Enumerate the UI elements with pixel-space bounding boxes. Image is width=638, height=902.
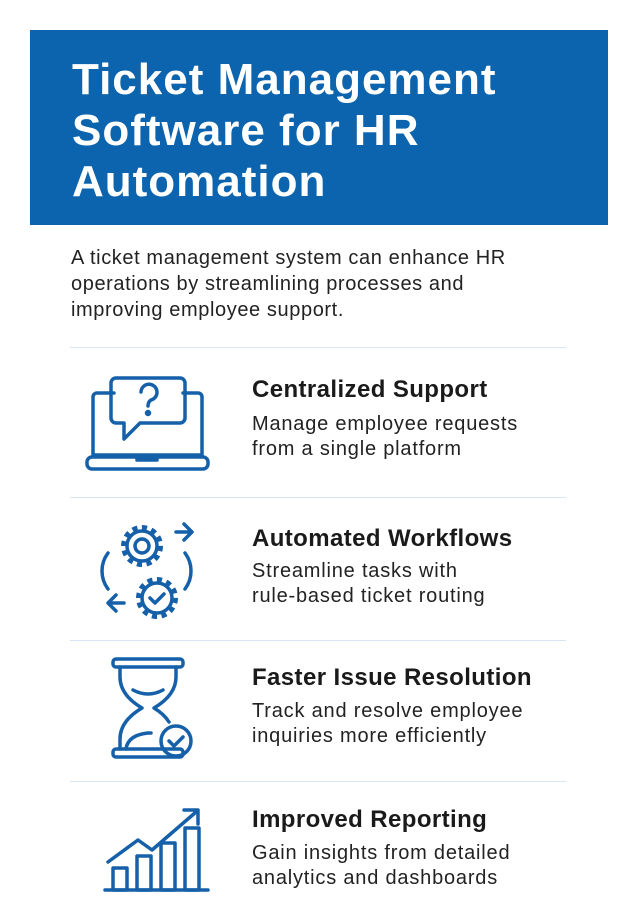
heading: faster issue resolution: Faster Issue Resolution xyxy=(252,664,532,691)
desc: centralized support: Manage employee requests xyxy=(252,413,518,435)
icon: laptop with question xyxy=(87,378,208,469)
desc: automated workflows xyxy=(252,560,485,607)
desc: faster issue resolution: inquiries more efficiently xyxy=(252,725,487,747)
title: Automation xyxy=(72,157,326,206)
desc: centralized support: from a single platform xyxy=(252,438,462,460)
title: Software for HR xyxy=(72,106,419,155)
desc: faster issue resolution xyxy=(252,700,523,747)
heading: centralized support: Centralized Support xyxy=(252,376,488,403)
heading: automated workflows: Automated Workflows xyxy=(252,525,513,552)
icon: bar chart growth xyxy=(105,810,208,890)
desc: improved reporting xyxy=(252,842,510,889)
desc: improved reporting: Gain insights from detailed xyxy=(252,842,510,864)
intro text: improving employee support. xyxy=(71,299,344,321)
desc: centralized support xyxy=(252,413,518,460)
intro text: operations by streamlining processes and xyxy=(71,273,464,295)
title xyxy=(72,55,497,206)
desc: improved reporting: analytics and dashboards xyxy=(252,867,498,889)
desc: automated workflows: rule-based ticket routing xyxy=(252,585,485,607)
desc: automated workflows: Streamline tasks with xyxy=(252,560,458,582)
icon: gears workflow xyxy=(102,524,192,616)
intro text xyxy=(71,247,506,321)
desc: faster issue resolution: Track and resolve employee xyxy=(252,700,523,722)
icon: hourglass with check xyxy=(113,659,191,757)
heading: improved reporting: Improved Reporting xyxy=(252,806,487,833)
title: Ticket Management xyxy=(72,55,497,104)
intro text: A ticket management system can enhance HR xyxy=(71,247,506,269)
header banner xyxy=(30,30,608,225)
